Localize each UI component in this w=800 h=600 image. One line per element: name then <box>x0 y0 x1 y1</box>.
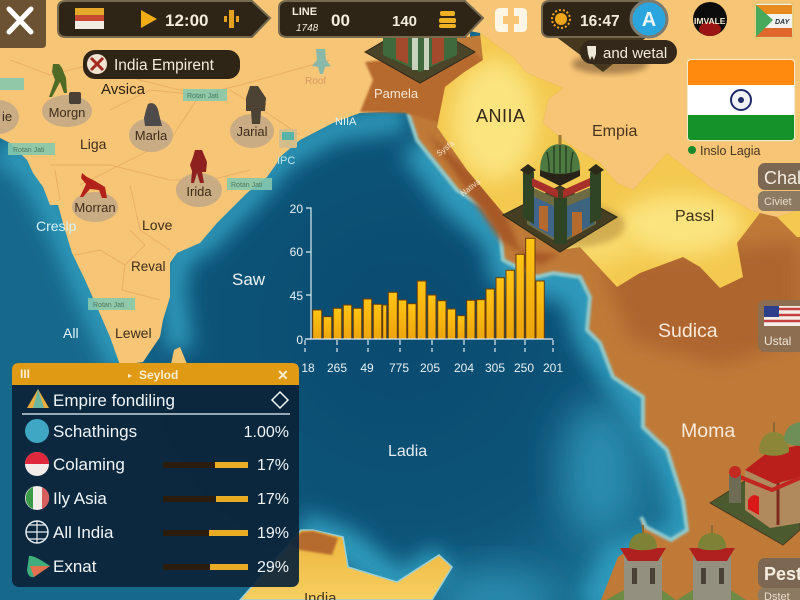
top bar: flag and timer: 12:00 <box>165 11 208 30</box>
top bar: line score: 00 <box>331 11 350 30</box>
eastern map labels: Sudica <box>658 320 718 342</box>
side tag: Ustal <box>758 300 800 352</box>
building: hidden temple under callout <box>555 36 648 74</box>
side tag: Chal: Chal <box>764 168 800 188</box>
side tag: Chal: Civiet <box>764 196 792 208</box>
chart y labels: 60 <box>290 245 303 259</box>
callout: India Empirent: India Empirent <box>114 57 215 74</box>
plate: Irida <box>176 150 222 207</box>
building: red palace right <box>710 422 800 545</box>
row: Schathings: Schathings <box>53 422 137 441</box>
icon: plant emblem <box>312 49 331 74</box>
top bar: line score: 1748 <box>296 23 319 34</box>
top bar: line score: LINE <box>292 6 317 18</box>
row: Exnat: 29% <box>257 559 289 576</box>
side tag: Pest <box>758 558 800 600</box>
eastern map labels: Empia <box>592 123 637 140</box>
chart x labels: 775 <box>389 361 409 375</box>
small flag <box>75 8 104 29</box>
map labels on western land: NIIA <box>335 116 357 128</box>
row: Ily Asia: 17% <box>257 491 289 508</box>
plate: Jarial: Jarial <box>236 124 268 139</box>
border lines <box>10 60 330 300</box>
land: western peninsula <box>0 0 470 365</box>
plate: Morran: Morran <box>74 200 116 215</box>
map labels on western land <box>36 76 357 341</box>
chart x labels: 205 <box>420 361 440 375</box>
callout: India Empirent <box>83 50 240 79</box>
row: Schathings <box>25 419 289 443</box>
small teal map tags: Rotan Jati <box>231 182 263 189</box>
badge: Imvale <box>693 2 727 36</box>
map labels on western land: Avsica <box>101 81 146 98</box>
close button <box>0 0 46 48</box>
temple columns <box>523 172 601 244</box>
map labels on western land: Love <box>142 217 173 233</box>
panel header: Seylod <box>139 368 178 382</box>
land: Empia and upper orange region <box>465 0 800 217</box>
plate: partial left: ie <box>2 109 12 124</box>
building: top center temple <box>365 20 475 83</box>
map labels on western land: Saw <box>232 270 266 289</box>
row: All India <box>26 521 289 543</box>
map labels on western land: Reval <box>131 259 166 274</box>
row: Ily Asia <box>25 486 289 510</box>
panel header: III <box>20 367 30 381</box>
land: Sri Lanka island <box>171 347 187 364</box>
flag caption: Inslo Lagia <box>700 144 761 158</box>
row: Colaming: 17% <box>257 457 289 474</box>
panel title <box>27 389 288 410</box>
chart bars <box>313 238 544 339</box>
eastern map labels: Passl <box>675 208 714 225</box>
bar chart <box>290 202 563 375</box>
chart y labels: 45 <box>290 289 303 303</box>
icon: barbell <box>224 10 239 28</box>
land: southern yellow shore <box>240 530 452 600</box>
row: Exnat <box>27 556 289 577</box>
small teal map tags: Rotan Jati <box>187 93 219 100</box>
chart y labels: 0 <box>296 333 303 347</box>
chart x labels: 265 <box>327 361 347 375</box>
top bar: clock: 16:47 <box>580 13 620 30</box>
plate: partial left <box>0 100 19 134</box>
eastern map labels: Moma <box>681 420 735 442</box>
coastal shallows <box>0 118 695 600</box>
row: All India: All India <box>53 523 114 542</box>
map labels on western land: Lewel <box>115 325 152 341</box>
avatar A: A <box>642 9 656 31</box>
map labels on western land: Roof <box>305 76 326 87</box>
chart x labels: 305 <box>485 361 505 375</box>
top bar: line score <box>279 1 483 37</box>
small teal map tags: Rotan Jati <box>93 302 125 309</box>
chart x labels: 201 <box>543 361 563 375</box>
callout: and wetal <box>580 40 677 64</box>
map labels on western land: IPC <box>277 155 295 167</box>
panel header <box>12 363 299 385</box>
chart x labels: 204 <box>454 361 474 375</box>
plate: Morgn <box>42 64 92 127</box>
badge: Day flag: DAY <box>775 19 791 26</box>
panel title: Empire fondiling <box>53 391 175 410</box>
building: central domed temple <box>503 135 625 252</box>
row: Ily Asia: Ily Asia <box>53 489 107 508</box>
chart y labels: 20 <box>290 202 303 216</box>
map labels on western land: All <box>63 325 79 341</box>
eastern map labels: Pamela <box>374 86 419 101</box>
icon: coins <box>439 11 456 28</box>
chart x labels: 18 <box>301 361 315 375</box>
top bar: clock <box>542 1 667 37</box>
eastern map labels: Nativa <box>459 177 483 198</box>
tribal figures and name plates <box>0 64 274 222</box>
chart axes <box>305 208 553 352</box>
panel header: ✕ <box>277 367 289 383</box>
land: eastern territories <box>360 0 800 600</box>
panel header: ▸ <box>128 371 132 380</box>
eastern map labels: Ladia <box>388 443 427 460</box>
badge: Imvale: IMVALE <box>694 16 726 26</box>
plate: Marla <box>129 103 173 152</box>
row: All India: 19% <box>257 525 289 542</box>
plate: Jarial <box>230 86 274 148</box>
land: yellow province Aniia and Passl <box>430 25 800 295</box>
chart x labels: 49 <box>360 361 374 375</box>
map labels on western land: Creslp <box>36 218 77 234</box>
top bar: flag and timer <box>58 1 270 37</box>
map labels on western land: Liga <box>80 136 107 152</box>
chart x labels <box>301 361 563 375</box>
side tag: Ustal: Ustal <box>764 334 791 348</box>
small teal map tags <box>0 78 272 310</box>
flag: India <box>687 59 795 141</box>
plate: Irida: Irida <box>186 184 212 199</box>
eastern map labels: ANIIA <box>476 106 526 126</box>
top bar: line score: 140 <box>392 13 417 30</box>
row: Colaming: Colaming <box>53 455 125 474</box>
plate: Morran <box>72 173 118 222</box>
panel: empire funding <box>12 363 299 587</box>
icon: expand cross <box>495 8 527 32</box>
plate: Marla: Marla <box>135 128 168 143</box>
callout: and wetal: and wetal <box>603 45 667 62</box>
row: Exnat: Exnat <box>53 557 97 576</box>
row: Schathings: 1.00% <box>244 424 289 441</box>
chart y labels <box>290 202 303 347</box>
building: lower pagoda right <box>677 525 746 600</box>
building: lower pagoda left <box>606 525 676 600</box>
chart x labels: 250 <box>514 361 534 375</box>
eastern map labels: Sysfa <box>435 138 456 158</box>
small teal map tags: Rotan Jati <box>13 147 45 154</box>
icon: small emblem <box>279 129 297 148</box>
eastern map labels <box>304 86 735 600</box>
temple left face <box>530 195 558 240</box>
plate: Morgn: Morgn <box>49 105 85 120</box>
side tag: Chal <box>758 163 800 211</box>
badge: Day flag <box>755 3 793 38</box>
row: Colaming <box>25 452 289 476</box>
